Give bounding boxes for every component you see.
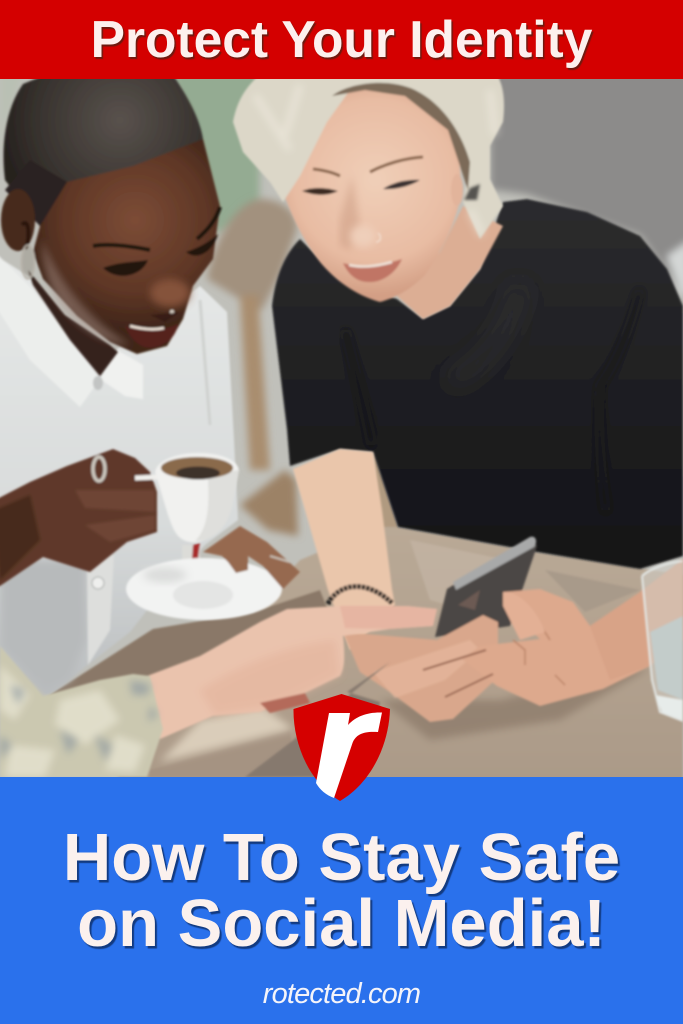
wooden table <box>48 449 683 790</box>
foreground pointing hand and floral sleeve <box>0 606 437 777</box>
shield <box>293 694 390 801</box>
website address: rotected.com <box>263 978 420 1010</box>
footer heading: How To Stay Safe <box>63 820 620 895</box>
woman right: black t-shirt <box>272 199 683 569</box>
water glass <box>642 561 683 721</box>
footer heading <box>63 820 620 961</box>
top banner: protect your identity <box>0 0 683 79</box>
photo: two women looking at a phone over coffee <box>0 79 683 777</box>
logo: red shield with white r <box>294 694 390 801</box>
background wall and foliage <box>0 70 683 790</box>
woman right: forearm and bracelet <box>293 449 395 650</box>
banner heading: Protect Your Identity <box>91 10 592 68</box>
wooden chair <box>207 199 298 536</box>
footer panel <box>0 777 683 1024</box>
phone and hands <box>343 537 683 722</box>
coffee cup and saucer with holding hand <box>0 449 300 620</box>
letter r <box>316 712 382 798</box>
blurred grey object behind logo <box>245 662 390 777</box>
woman left: head, neck, ear and earring <box>1 75 220 376</box>
footer heading: on Social Media! <box>77 886 606 961</box>
woman right: head, neck and hair <box>233 72 504 319</box>
woman left: white shirt <box>0 255 238 696</box>
